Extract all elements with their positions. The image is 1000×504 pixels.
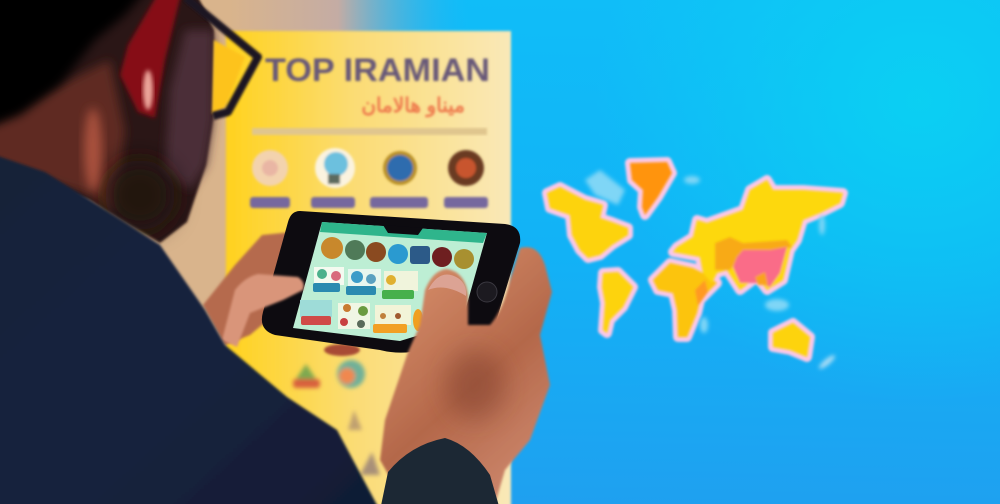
smartphone xyxy=(262,211,520,353)
glasses xyxy=(186,0,258,116)
lens xyxy=(212,40,245,114)
face and cheek xyxy=(165,30,214,190)
ear highlight xyxy=(143,70,153,110)
left thumb xyxy=(222,274,304,347)
person: navy jacket xyxy=(0,150,385,504)
background: warm glow left of poster xyxy=(0,0,470,504)
poster subtitle in Persian: میناو هالامان xyxy=(361,95,465,118)
phone body xyxy=(262,211,520,353)
head base xyxy=(0,0,214,243)
ear xyxy=(120,0,182,118)
jacket sleeve cuff xyxy=(378,438,503,504)
neck warm tone xyxy=(0,60,125,215)
game cards xyxy=(300,267,423,333)
frame xyxy=(186,0,258,116)
poster title: TOP IRAMIAN xyxy=(265,52,490,88)
map landmasses xyxy=(547,162,843,357)
person: right hand with thumb xyxy=(380,247,552,504)
world map xyxy=(547,162,843,371)
panel: blurred poster xyxy=(226,31,511,504)
home button xyxy=(477,282,497,302)
person: left hand behind phone xyxy=(203,232,360,356)
hair xyxy=(0,0,155,130)
person: head and neck xyxy=(0,0,258,243)
fingers under phone xyxy=(324,344,360,356)
map islands xyxy=(585,170,837,371)
beard shadow xyxy=(105,160,175,230)
poster avatars row xyxy=(252,148,484,188)
thumb nail xyxy=(428,274,466,296)
neck highlight xyxy=(84,108,102,192)
map halo xyxy=(547,162,843,357)
game icon row xyxy=(321,237,474,269)
phone screen xyxy=(293,222,487,341)
hand shadow xyxy=(445,350,505,420)
screen header bar xyxy=(320,222,487,243)
poster name tags xyxy=(250,197,488,208)
poster lower icons xyxy=(293,360,380,475)
poster rule xyxy=(252,128,487,135)
notch xyxy=(383,225,423,235)
palm and fingers xyxy=(380,247,552,504)
background: cyan glow upper right xyxy=(460,0,1000,504)
